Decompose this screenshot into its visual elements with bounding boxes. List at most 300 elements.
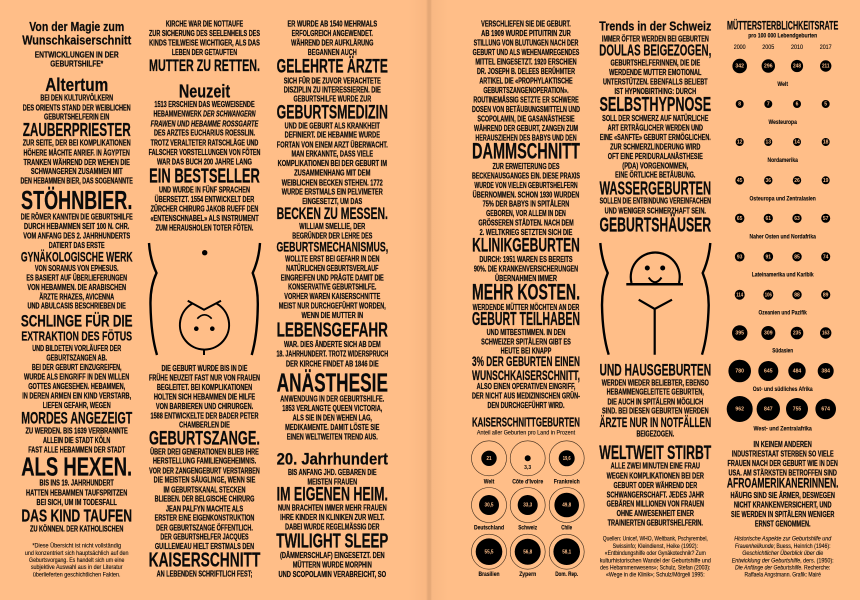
text block: WURDE ERSTMALS EIN PELVIMETER [282,188,383,197]
credits: Die Anfänge der Geburtshilfe. Recherche: [735,565,831,571]
text block: IST HYPNOBIRTHING: DURCH [614,87,696,96]
row: Osteuropa und Zentralasien: Osteuropa und Zentralasien [750,196,816,202]
text block: WAR DAS BUCH 200 JAHRE LANG [157,157,252,166]
text block [731,491,835,528]
text block: DER GEBURTSHELFER JACQUES [160,533,249,542]
footnote: überlieferten geschichtlichen Fakten. [33,572,121,578]
footnote: und konzentriert sich hauptsächlich auf den [25,551,129,557]
row: Ozeanien und Pazifik: 89 [823,292,829,298]
panel: column 5 trends in Switzerland [599,19,712,578]
row: Osteuropa und Zentralasien: 26 [794,178,800,184]
text block: ÜBERNOMMEN. SCHON 1930 WURDEN [473,191,580,200]
text block: KONSERVATIVE GEBURTSHILFE. [288,283,376,292]
text block: ERNST GENOMMEN. [755,519,811,528]
text block: ERSTER EINE EIGENKONSTRUKTION [155,514,255,523]
text block: HEUTE BEI KNAPP [501,347,551,356]
text block [149,20,260,57]
text block: GOTTES ANGESEHEN. HEBAMMEN, [28,382,125,391]
text block: SOLLEN DIE ENTBINDUNG VEREINFACHEN [600,197,711,206]
year axis: 2017 [820,44,832,51]
footnote: subjektive Auswahl aus in der Literatur [31,565,123,571]
text block: WILLIAM SMELLIE, DER [299,222,366,231]
text block: (DÄMMERSCHLAF) EINGESETZT. DEN [280,551,385,560]
text block: WÄHREND DER AUFKLÄRUNG [291,39,373,48]
row: Südasien: 163 [822,331,830,337]
highlight: Dammschnitt: DAMMSCHNITT [472,138,580,163]
highlight: 3% der Geburten: WUNSCHKAISERSCHNITT, [472,367,580,383]
text block [278,504,387,532]
text block: BEGLEITET. BEI KOMPLIKATIONEN [157,383,252,392]
row: Ost- und südliches Afrika: Ost- und südliches Afrika [753,387,813,393]
panel: column 6 closing text and credits [727,440,839,578]
credits: Entwicklung der Geburtshilfe, ders. (1950): [732,558,834,564]
highlight: Geburtszange: GEBURTSZANGE. [149,428,260,449]
chart: caesarean births proportional circles: 19,6 [563,456,571,462]
text block: BEI DER GEBURT EINZUGREIFEN, [32,363,122,372]
text block: ALSO EINEN OPERATIVEN EINGRIFF, [477,382,575,391]
text block [284,76,381,104]
text block: KOMPLIKATIONEN BEI DER GEBURT IM [278,159,387,168]
text block: EINE «SANFTE» GEBURT ERMÖGLICHEN. [600,133,711,142]
text block: VOM ANFANG DES 2. JAHRHUNDERTS [23,232,130,241]
row: Naher Osten und Nordafrika: Naher Osten und Nordafrika [750,234,816,240]
highlight: Gynäkologische Werk: GYNÄKOLOGISCHE WERK [21,250,133,265]
highlight: Selbsthypnose: SELBSTHYPNOSE [599,94,711,116]
text block: KIRCHE WAR DIE NOTTAUFE [166,20,243,29]
text block: DEFINIERT. DIE HEBAMME WURDE [285,131,380,140]
row: Ost- und südliches Afrika: 645 [764,369,773,375]
text block: UND BILDETEN VORLÄUFER DER [32,344,121,353]
text block [602,378,709,416]
sources: Quellen: Unicef, WHO, Weltbank, Pschyrembel, [603,537,708,543]
text block: DURCH HEBAMMEN SEIT 100 N. CHR. [24,222,129,231]
chart heading [727,17,838,39]
text block [292,222,372,240]
text block: FORTAN VON EINEM ARZT ÜBERWACHT. [277,140,388,149]
highlight: Schlinge für die Extraktion des Fötus: EXTRAKTION DES FÖTUS [21,329,132,344]
text block [150,186,259,233]
highlight: Das Kind taufen: DAS KIND TAUFEN [21,506,132,526]
year axis: 2010 [791,44,803,51]
highlight: Mutter zu retten: MUTTER ZU RETTEN. [149,56,260,75]
text block [472,20,580,143]
panel: column 2 early modern period [149,20,261,578]
text block: GRÖSSEREN STÄDTEN. NACH DEM [478,219,574,228]
text block [277,121,388,206]
icon: pregnant belly with baby head down [149,243,260,355]
highlight: Zauberpriester: ZAUBERPRIESTER [23,120,131,140]
text block: HERSTELLUNG FAMILIENGEHEIMNIS. [153,457,256,466]
row: Westeuropa: Westeuropa [769,120,797,126]
row: Lateinamerika und Karibik: 91 [766,254,771,260]
text block: GEBURTSHELFERINNEN, DIE DIE [610,59,700,68]
row: Nordamerika: 18 [823,140,829,146]
text block: ARTIKEL DIE «PROPHYLAKTISCHE [479,77,573,86]
text block: ALLEIN DIE STADT KÖLN [43,436,111,445]
text block [287,20,377,57]
row: West- und Zentralafrika: 755 [793,407,801,413]
text block: DER GEBURTSZANGE ÖFFENTLICH. [156,523,253,532]
text block [21,139,133,186]
text line: AN LEBENDEN SCHRIFTLICH FEST; [157,569,252,578]
text block: MÜTTERN WURDE MORPHIN [293,560,372,569]
row: Lateinamerika und Karibik [735,252,830,279]
highlight: Doulas beigezogen: DOULAS BEIGEZOGEN, [599,43,711,60]
panel: column 3 enlightenment and 20th century [276,20,388,579]
text block: UNTERSTÜTZEN. EBENFALLS BELIEBT [603,78,708,87]
chart: caesarean births proportional circles: 21 [486,456,492,462]
sources [600,537,711,578]
chart: caesarean births proportional circles: 55,5 [484,549,494,555]
highlight: Im eigenen Heim: IM EIGENEN HEIM. [277,484,388,505]
heading: Weltweit stirbt: WELTWEIT STIRBT [599,443,712,464]
text block: DES ORIENTS STAND DER WEIBLICHEN [23,103,131,112]
row: Naher Osten und Nordafrika: 61 [766,216,771,222]
text block: 75% DER BABYS IN SPITÄLERN [483,200,570,209]
row: Lateinamerika und Karibik: 74 [823,254,829,260]
row: Westeuropa: 6 [796,102,799,108]
credits [732,537,834,578]
text block: UND ABULCASIS BESCHRIEBEN DIE [28,302,126,311]
text block: GEBOREN, VOR ALLEM IN DEN [486,209,566,218]
chart: caesarean births proportional circles: Dom. Rep. [555,572,578,578]
text line: BEIGEZOGEN. [636,429,674,438]
chart: caesarean births proportional circles [472,441,584,578]
text block: UND DIE GEBURT ALS KRANKHEIT [285,121,380,130]
highlight: Lebensgefahr: LEBENSGEFAHR [277,320,388,342]
heading: Neuzeit: Neuzeit [179,80,230,101]
text block: GEBURT UND ALS WEHENAMREGENDES [473,48,579,57]
text block [26,426,128,455]
text block: DR. JOSEPH B. DELEES BERÜHMTER [477,67,575,76]
text block [276,340,388,368]
highlight: Ein Bestseller: EIN BESTSELLER [149,165,260,187]
heading: Trends in der Schweiz: Trends in der Schweiz [599,19,712,34]
year axis [734,44,832,51]
row: Nordamerika [736,138,830,164]
text block: JEAN PALFYN MACHTE ALS [166,504,243,513]
text block: WOLLTE ERST BEI GEFAHR IN DEN [285,255,380,264]
subtitle: GEBURTSHILFE* [50,58,104,68]
text block: TROTZ VERALTETER RATSCHLÄGE UND [151,138,259,147]
text block [603,59,708,96]
row: Südasien: 309 [764,331,773,337]
text block: EINEN WELTWEITEN TREND AUS. [287,432,378,441]
heading: 20. Jahrhundert: 20. Jahrhundert [277,450,388,469]
text block: MITTEL EINGESETZT. 1920 ERSCHIEN [475,58,577,67]
text block: GEBURTSHELFERIN EIN [44,112,110,121]
text block: 90%. DIE KRANKENVERSICHERUNGEN [474,265,578,274]
text block: DURCH: 1951 WAREN ES BEREITS [479,255,573,264]
text block: 2. WELTKRIEG SETZTEN SICH DIE [480,228,572,237]
row: Welt [732,59,831,88]
text block: MEISTEN FRAUEN [307,477,357,486]
text block: BLIEBEN. DER BELGISCHE CHIRURG [155,495,254,504]
text block [728,440,838,477]
text block: FRAWEN UND HEBAMME ROSSGARTE [151,119,259,128]
credits: Frauenheilkunde; Buess, Heinrich (1946): [735,544,831,550]
title [22,19,132,47]
panel: column 1 title and antiquity [21,19,133,578]
text block: DABEI WURDE REGELMÄSSIG DER [285,523,380,532]
text block: DEN DURCHGEFÜHRT WIRD. [488,401,564,410]
row: Ozeanien und Pazifik: 88 [794,292,800,298]
text block: VON SORANUS VON EPHESUS. [35,264,119,273]
row: Naher Osten und Nordafrika: 63 [794,216,800,222]
subtitle [35,49,119,68]
sources: kulturhistorischen Wandel der Geburtshilfe und [600,558,711,564]
highlight: Schlinge für die Extraktion des Fötus: SCHLINGE FÜR DIE [21,312,133,331]
text block: EINE ÖRTLICHE BETÄUBUNG. [615,171,695,180]
text block: HEBAMMENGELEITETE GEBURTEN, [607,388,704,397]
text block: WERDENDE MUTTER EMOTIONAL [609,68,702,77]
text block: STILLUNG VON BLUTUNGEN NACH DER [474,39,579,48]
row: Südasien: 235 [793,331,801,337]
text block: BEGANNEN AUCH [308,48,357,57]
text block [279,255,386,320]
panel: column 6 maternal mortality [727,17,838,39]
highlight: Geburtshäuser: GEBURTSHÄUSER [599,214,711,237]
footnote: Geburtsvorgang. Es handelt sich um eine [29,558,125,564]
text block: FRÜHE NEUZEIT FAST NUR VON FRAUEN [149,373,260,382]
text block: DIE GEBURT WURDE BIS IN DIE [162,364,248,373]
highlight: Geburt teilhaben: GEBURT TEILHABEN [472,309,580,329]
chart: caesarean births proportional circles: 33,3 [523,503,532,509]
panel: column 4 twentieth century continued and caesarean chart [472,20,580,436]
text block: 1513 ERSCHIEN DAS WEGWEISENDE [154,100,255,109]
credits: Raffaela Angstmann. Grafik: Mairé [745,572,821,578]
text block: WAR. DIES ÄNDERTE SICH AB DEM [284,340,381,349]
year axis: 2000 [734,44,746,51]
highlight: Klinikgeburten: KLINIKGEBURTEN [472,236,580,257]
text block: ROUTINEMÄSSIG SETZTE ER SCHWERE [473,96,579,105]
text block: HATTEN HEBAMMEN TAUFSPRITZEN [26,488,128,497]
title: Von der Magie zum [29,19,124,34]
text block: ANWENDUNG IN DER GEBURTSHILFE. [280,394,384,403]
chart: caesarean births proportional circles: 58,1 [562,549,571,555]
text block [26,479,128,507]
text block: DATIERT DAS ERSTE [49,241,105,250]
row: Ost- und südliches Afrika: 780 [735,369,744,375]
highlight: Twilight Sleep: TWILIGHT SLEEP [276,531,388,553]
text line: IMMER ÖFTER WERDEN BEI GEBURTEN [602,35,709,44]
text block [22,344,131,410]
text block: DISZIPLIN ZU INTERESSIEREN. DIE [284,86,381,95]
text block: DIE AUCH IN SPITÄLERN MÖGLICH [607,397,703,406]
text block: HEBAMMENWERK DER SCHWANGERN [154,110,256,119]
text block: SCHWANGERSCHAFT. JEDES JAHR [607,490,704,499]
row: Lateinamerika und Karibik: 93 [737,254,743,260]
text block: UND WURDE IN FÜNF SPRACHEN [159,186,250,195]
chart heading: pro 100 000 Lebendgeburten [748,33,817,39]
sources: des Hebammenwesens»; Schulz, Stefan (2003): [600,565,711,571]
text line: ZU KÖNNEN. DER KATHOLISCHEN [30,525,124,534]
text line: WERDENDE MÜTTER MÖCHTEN AN DER [473,303,580,312]
text block: ZUR SCHMERZLINDERUNG WIRD [610,142,701,151]
row: West- und Zentralafrika: 674 [821,407,830,413]
text block: VON HEBAMMEN. DIE ARABISCHEN [27,283,126,292]
row: West- und Zentralafrika: 847 [764,407,773,413]
text block: ÜBERNAHMEN IMMER [495,274,557,283]
text block: VORHER WAREN KAISERSCHNITTE [284,292,380,301]
row: Lateinamerika und Karibik: 85 [794,254,800,260]
text block: KINDS TEILWEISE WICHTIGER, ALS DAS [149,39,260,48]
sources: «Entbindungshilfe oder Gynäkotechnik? Zum [605,551,706,557]
row: Südasien: 395 [735,331,744,337]
text block [481,328,571,356]
text block: VOR DER ZANGENGEBURT VERSTARBEN [149,466,260,475]
text block [149,447,260,551]
row: Naher Osten und Nordafrika: 65 [737,216,743,222]
text block: WERDEN WIEDER BELIEBTER, EBENSO [602,378,709,387]
row: Ozeanien und Pazifik: 114 [736,292,743,298]
row: Osteuropa und Zentralasien: 45 [737,178,743,184]
text block: ERFOLGREICH ANGEWENDET. [292,29,373,38]
text block: BEI DEN KULTURVÖLKERN [40,94,113,103]
text block: ZÜRCHER CHIRURG JAKOB RUEFF DEN [151,205,259,214]
text block: WURDE VON VIELEN GEBURTSHELFERN [474,181,578,190]
row: Osteuropa und Zentralasien: 19 [823,178,829,184]
text block [474,255,578,283]
text block: GUILLEMEAU HIELT ERSTMALS DEN [155,542,254,551]
row: Westeuropa: 7 [767,102,770,108]
highlight: 3% der Geburten: 3% DER GEBURTEN EINEN [472,353,580,369]
chart: caesarean births proportional circles: Frankreich [554,479,580,485]
text block: DER KIRCHE FINDET AB 1846 DIE [286,359,379,368]
highlight: Schlinge für die Extraktion des Fötus [21,312,133,344]
highlight: Mordes angezeigt: MORDES ANGEZEIGT [21,409,132,427]
text block: DER NICHT AUS MEDIZINISCHEN GRÜN- [472,391,580,400]
text block: ZUR ERWEITERUNG DES [492,162,560,171]
text block: DEN HEBAMMEN BIER, DAS SOGENANNTE [21,177,133,186]
chart heading: Anteil aller Geburten pro Land in Prozent [477,430,575,436]
credits: Historische Aspekte zur Geburtshilfe und [734,537,832,543]
chart heading [472,416,580,436]
highlight: Kaiserschnitt: KAISERSCHNITT [149,549,260,571]
text block [288,468,377,486]
text block: (PDA) VORGENOMMEN, [622,161,688,170]
row: Naher Osten und Nordafrika [735,214,830,240]
text block [149,364,260,429]
highlight: Mehr Kosten: MEHR KOSTEN. [472,279,580,304]
text block: ALLE ZWEI MINUTEN EINE FRAU [611,462,700,471]
text block: BEGRÜNDER DER LEHRE DES [292,231,372,240]
chart: caesarean births proportional circles: Côte d'Ivoire [512,479,544,485]
icon: belly with smiling face and Y shape [600,243,710,355]
row: Westeuropa: 5 [824,102,827,108]
footnote [25,543,129,578]
text block: DIE RÖMER KANNTEN DIE GEBURTSHILFE [21,212,133,221]
text block: BEI SICH, UM IM TODESFALL [37,498,117,507]
row: Lateinamerika und Karibik: Lateinamerika und Karibik [752,273,814,279]
highlight: Anästhesie: ANÄSTHESIE [277,367,388,397]
chart: caesarean births proportional circles: Brasilien [478,572,500,578]
highlight: Gelehrte Ärzte: GELEHRTE ÄRZTE [277,55,388,78]
row: Welt: 248 [793,64,801,70]
text block: MEIST NUR DURCHGEFÜHRT WORDEN, [279,301,386,310]
text block: GEBURT ODER WÄHREND DER [613,481,697,490]
row: Welt: 342 [735,64,744,70]
text block: ÜBERSETZT. 1554 ENTWICKELT DER [155,195,255,204]
chart: caesarean births proportional circles: Zypern [519,572,536,578]
text block: MAN ERKANNTE, DASS VIELE [291,150,373,159]
credits: Geschichtlicher Überblick über die [742,550,824,557]
row: Ozeanien und Pazifik [735,290,830,317]
text block: ALS SIE IN DEN WEHEN LAG, [293,413,372,422]
text block: IN KEINEM ANDEREN [754,440,812,449]
text block: OHNE ANWESENHEIT EINER [617,509,694,518]
chart: caesarean births proportional circles: Deutschland [474,526,504,532]
text block [280,394,384,441]
row: Ozeanien und Pazifik: 106 [765,292,772,298]
row: Ost- und südliches Afrika: 484 [793,369,801,375]
chart: caesarean births proportional circles: Schweiz [518,526,537,532]
text block: DOSEN VON BETÄUBUNGSMITTELN UND [472,105,580,114]
highlight: und Hausgeburten: UND HAUSGEBURTEN [599,361,711,380]
row: Südasien [732,325,831,355]
chart: caesarean births proportional circles: Chile [561,526,573,532]
row: Welt: 296 [764,64,773,70]
row: Ost- und südliches Afrika [728,360,834,393]
text block: GEBURTSHILFE WURDE ZUR [293,95,371,104]
text block: WÄHREND DER GEBURT, ZANGEN ZUM [474,124,578,133]
text block: SICH FÜR DIE ZUVOR VERACHTETE [284,76,381,85]
text block: ÄRZTE RHAZES, AVICENNA [39,292,114,301]
text block: CHAMBERLEN DIE [179,420,230,429]
text block: UND MITBESTIMMEN. IN DEN [487,328,566,337]
text block: DIE MEISTEN SÄUGLINGE, WENN SIE [154,476,255,485]
row: Westeuropa [736,100,830,126]
text block: FAST ALLE HEBAMMEN DER STADT [28,446,125,455]
text block: AB 1909 WURDE PITUITRIN ZUR [481,29,571,38]
row: West- und Zentralafrika: West- und Zentralafrika [754,426,812,432]
row: Ost- und südliches Afrika: 384 [821,369,830,375]
row: Nordamerika: 14 [794,140,800,146]
text block: HOLTEN SICH HEBAMMEN DIE HILFE [154,392,255,401]
row: Südasien: Südasien [772,349,793,355]
text block: SCHWEIZER SPITÄLERN GIBT ES [481,337,571,346]
row: Osteuropa und Zentralasien [735,176,830,202]
text block [21,212,133,250]
text block: ZUR SICHERUNG DES SEELENHEILS DES [149,29,260,38]
highlight: 3% der Geburten [472,353,580,383]
text block [23,94,131,121]
highlight: Geburtsmedizin: GEBURTSMEDIZIN [277,102,388,124]
text block: NATÜRLICHEN GEBURTSVERLAUF [286,264,379,273]
text block: OFT EINE PERIDURALANÄSTHESIE [608,152,703,161]
row: Osteuropa und Zentralasien: 36 [766,178,771,184]
text block: HERAUSZIEHEN DES BABYS UND DEN [475,134,577,143]
text block [472,382,580,410]
text block: ART ERTRÄGLICHER WERDEN UND [608,123,703,132]
text block: SIND. BEI DIESEN GEBURTEN WERDEN [602,407,709,416]
text block: DES ARZTES EUCHARIUS ROESSLIN. [154,129,255,138]
highlight: Becken zu messen: BECKEN ZU MESSEN. [277,205,388,223]
text block: EINGESETZT, UM DAS [302,197,362,206]
year axis: 2005 [762,44,775,51]
text block: ZUM HERAUSHOLEN TOTER FÖTEN. [156,224,253,233]
text block: 1588 ENTWICKELTE DER BADER PETER [150,411,259,420]
text block: VON BARBIEREN UND CHIRURGEN. [156,402,253,411]
chart: caesarean births proportional circles: 3,3 [524,465,531,471]
chart: caesarean births proportional circles: 56,8 [523,549,532,555]
text block: ZUR SEITE, DER BEI KOMPLIKATIONEN [23,139,131,148]
text block: BIS INS 19. JAHRHUNDERT [40,479,114,488]
text block: ZUSAMMENHANG MIT DEM [294,169,371,178]
text block: IHRE KINDER IN KLINIKEN ZUR WELT. [280,513,384,522]
row: Nordamerika: 13 [766,140,771,146]
row: Westeuropa: 8 [738,102,741,108]
